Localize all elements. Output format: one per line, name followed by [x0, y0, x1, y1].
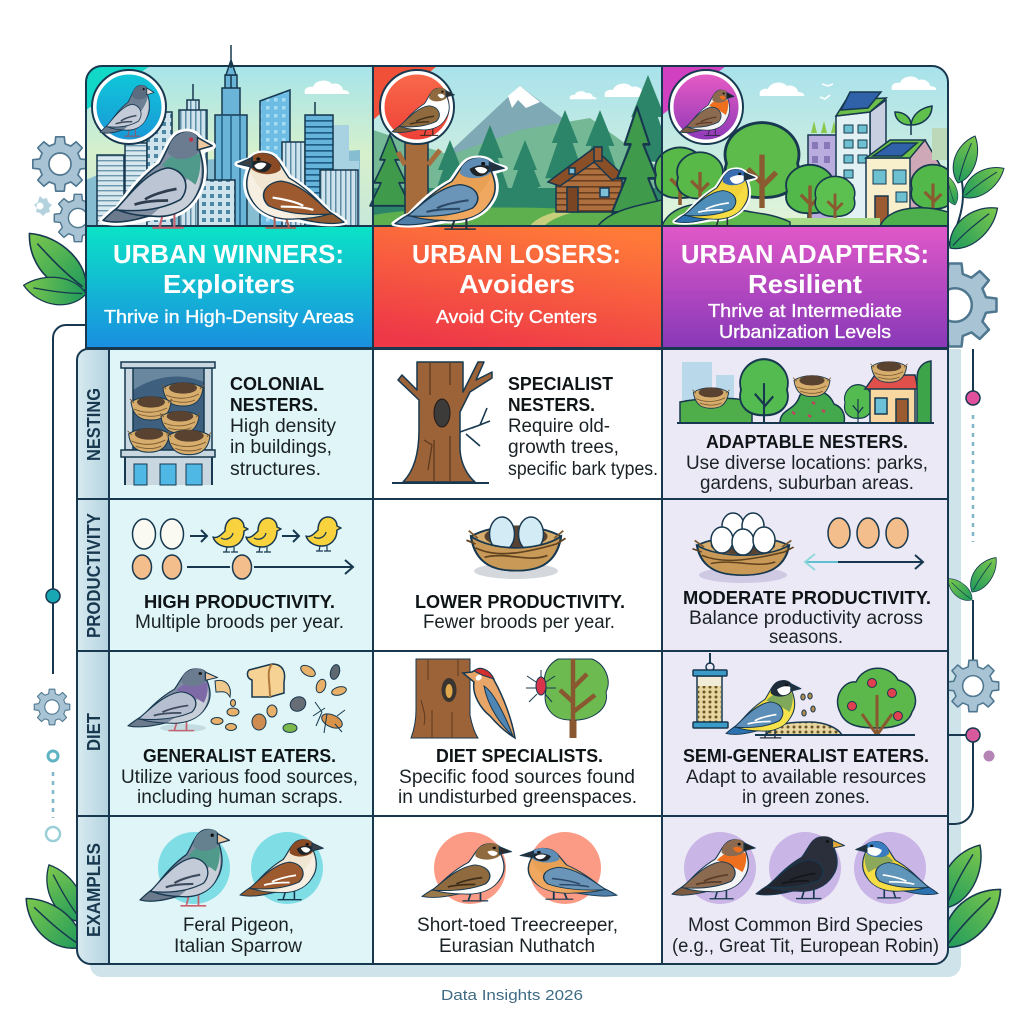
text: moderate productivity: seasons.: [769, 627, 843, 648]
text: feral pigeon, italian sparrow: [174, 915, 302, 957]
connector: left timeline: [34, 325, 86, 841]
badge: pigeon: [92, 70, 166, 144]
header: urban winners: Thrive in High-Density Areas: [104, 307, 354, 327]
text: moderate productivity: [683, 587, 931, 648]
text: adaptable nesters: [686, 431, 928, 494]
header: urban winners: URBAN WINNERS:: [113, 239, 344, 269]
text: specialist nesters: specific bark types.: [508, 459, 658, 480]
decoration: left gears: [33, 137, 102, 242]
row label: examples: EXAMPLES: [84, 843, 104, 937]
bird: house sparrow large: [238, 153, 344, 228]
text: moderate productivity: MODERATE PRODUCTIVITY.: [683, 587, 931, 608]
examples: treecreeper and nuthatch: [422, 832, 617, 904]
header: urban winners: Exploiters: [163, 269, 295, 299]
text: adaptable nesters: Use diverse locations: parks,: [686, 453, 928, 474]
icon: nest with two eggs: [466, 517, 566, 579]
text: colonial nesters: [230, 373, 336, 480]
cabin: [548, 147, 624, 212]
text: generalist eaters: [121, 745, 358, 808]
text: treecreeper, nuthatch: Short-toed Treecreeper,: [417, 915, 618, 936]
text: high productivity: [135, 591, 344, 633]
text: generalist eaters: Utilize various food sources,: [121, 767, 358, 788]
text: specialist nesters: NESTERS.: [508, 394, 595, 415]
text: colonial nesters: High density: [230, 416, 336, 437]
icon: old-growth tree: [392, 362, 492, 483]
background shadow panel: [90, 349, 961, 977]
text: colonial nesters: COLONIAL: [230, 373, 324, 394]
column fill: adapters: [662, 349, 948, 964]
decoration: left leaves: [16, 222, 97, 309]
icon: adaptable nest sites: [677, 359, 934, 423]
text: treecreeper, nuthatch: Eurasian Nuthatch: [439, 936, 595, 957]
decoration: right gear: [914, 264, 996, 346]
text: semi-generalist eaters: in green zones.: [742, 787, 870, 808]
text: moderate productivity: Balance productivity across: [689, 608, 923, 629]
table body: [77, 349, 948, 964]
text: treecreeper, nuthatch: [417, 915, 618, 957]
icon: pigeon with food scraps: [128, 663, 347, 733]
icon: nest with five eggs and seasonal arrow: [692, 513, 923, 583]
text: feral pigeon, italian sparrow: Feral Pigeon,: [183, 915, 294, 936]
text: common species: [672, 915, 939, 957]
row label: productivity: PRODUCTIVITY: [84, 513, 104, 638]
text: colonial nesters: in buildings,: [230, 437, 332, 458]
row label: diet: DIET: [84, 713, 104, 751]
badge: treecreeper: [380, 70, 454, 144]
examples: feral pigeon and italian sparrow: [140, 829, 323, 906]
column fill: winners: [109, 349, 373, 964]
header: urban adapters: [662, 226, 948, 348]
text: colonial nesters: NESTERS.: [230, 394, 318, 415]
text: generalist eaters: GENERALIST EATERS.: [143, 745, 336, 766]
text: generalist eaters: including human scraps.: [137, 787, 343, 808]
text: lower productivity: LOWER PRODUCTIVITY.: [415, 591, 625, 612]
footer credit: Data Insights 2026: [441, 987, 583, 1004]
text: common species: (e.g., Great Tit, European Robin): [672, 936, 939, 957]
text: specialist nesters: growth trees,: [508, 437, 619, 458]
header: urban adapters: Resilient: [748, 269, 862, 299]
icon: feeder with great tit and fruit tree: [693, 653, 916, 738]
text: diet specialists: DIET SPECIALISTS.: [436, 745, 603, 766]
scene panel: green neighbourhood: [655, 66, 955, 226]
icon: woodpecker on trunk, insect and tree: [411, 659, 608, 738]
bird: blue tit large: [675, 169, 755, 226]
decoration: top right plant: [940, 132, 1010, 257]
row label: nesting: NESTING: [84, 388, 104, 461]
icon: eggs to chicks sequence: [132, 517, 353, 579]
text: semi-generalist eaters: [683, 745, 929, 808]
text: high productivity: HIGH PRODUCTIVITY.: [144, 591, 335, 612]
category column: [77, 349, 109, 964]
text: semi-generalist eaters: SEMI-GENERALIST EATERS.: [683, 745, 929, 766]
scene panel: forest: [370, 66, 673, 226]
header: urban losers: Avoid City Centers: [436, 307, 597, 327]
header: urban adapters: Thrive at Intermediate: [708, 301, 902, 321]
decoration: bottom left leaves: [15, 858, 93, 960]
text: semi-generalist eaters: Adapt to available resources: [686, 767, 926, 788]
header: urban losers: [373, 226, 662, 348]
text: specialist nesters: SPECIALIST: [508, 373, 614, 394]
text: high productivity: Multiple broods per year.: [135, 612, 344, 633]
badge: robin: [669, 70, 743, 144]
decoration: bottom right leaves: [930, 837, 1012, 958]
spire above the frame: [226, 45, 236, 75]
text: diet specialists: [398, 745, 637, 808]
text: adaptable nesters: gardens, suburban areas.: [700, 473, 914, 494]
text: diet specialists: in undisturbed greenspaces.: [398, 787, 637, 808]
text: lower productivity: Fewer broods per year.: [423, 612, 615, 633]
column frames for top table: [86, 66, 948, 348]
text: common species: Most Common Bird Species: [688, 915, 923, 936]
scene panel: city skyline: [87, 67, 372, 225]
header: urban losers: Avoiders: [459, 269, 575, 299]
examples: robin, blackbird, blue tit: [672, 832, 938, 904]
connector: right timeline: [943, 349, 1003, 824]
text: colonial nesters: structures.: [230, 459, 321, 480]
header: urban adapters: URBAN ADAPTERS:: [681, 239, 929, 269]
header: urban winners: [86, 226, 373, 348]
header: urban losers: URBAN LOSERS:: [412, 239, 621, 269]
bird: pigeon large: [103, 132, 212, 228]
bird: nuthatch large: [395, 158, 504, 229]
header: urban adapters: Urbanization Levels: [719, 322, 891, 342]
text: adaptable nesters: ADAPTABLE NESTERS.: [706, 431, 908, 452]
text: specialist nesters: Require old-: [508, 416, 610, 437]
icon: colonial nests on building: [121, 362, 215, 485]
column fill: losers: [373, 349, 662, 964]
text: lower productivity: [415, 591, 625, 633]
text: specialist nesters: [508, 373, 658, 480]
text: diet specialists: Specific food sources found: [399, 767, 635, 788]
text: feral pigeon, italian sparrow: Italian Sparrow: [174, 936, 302, 957]
